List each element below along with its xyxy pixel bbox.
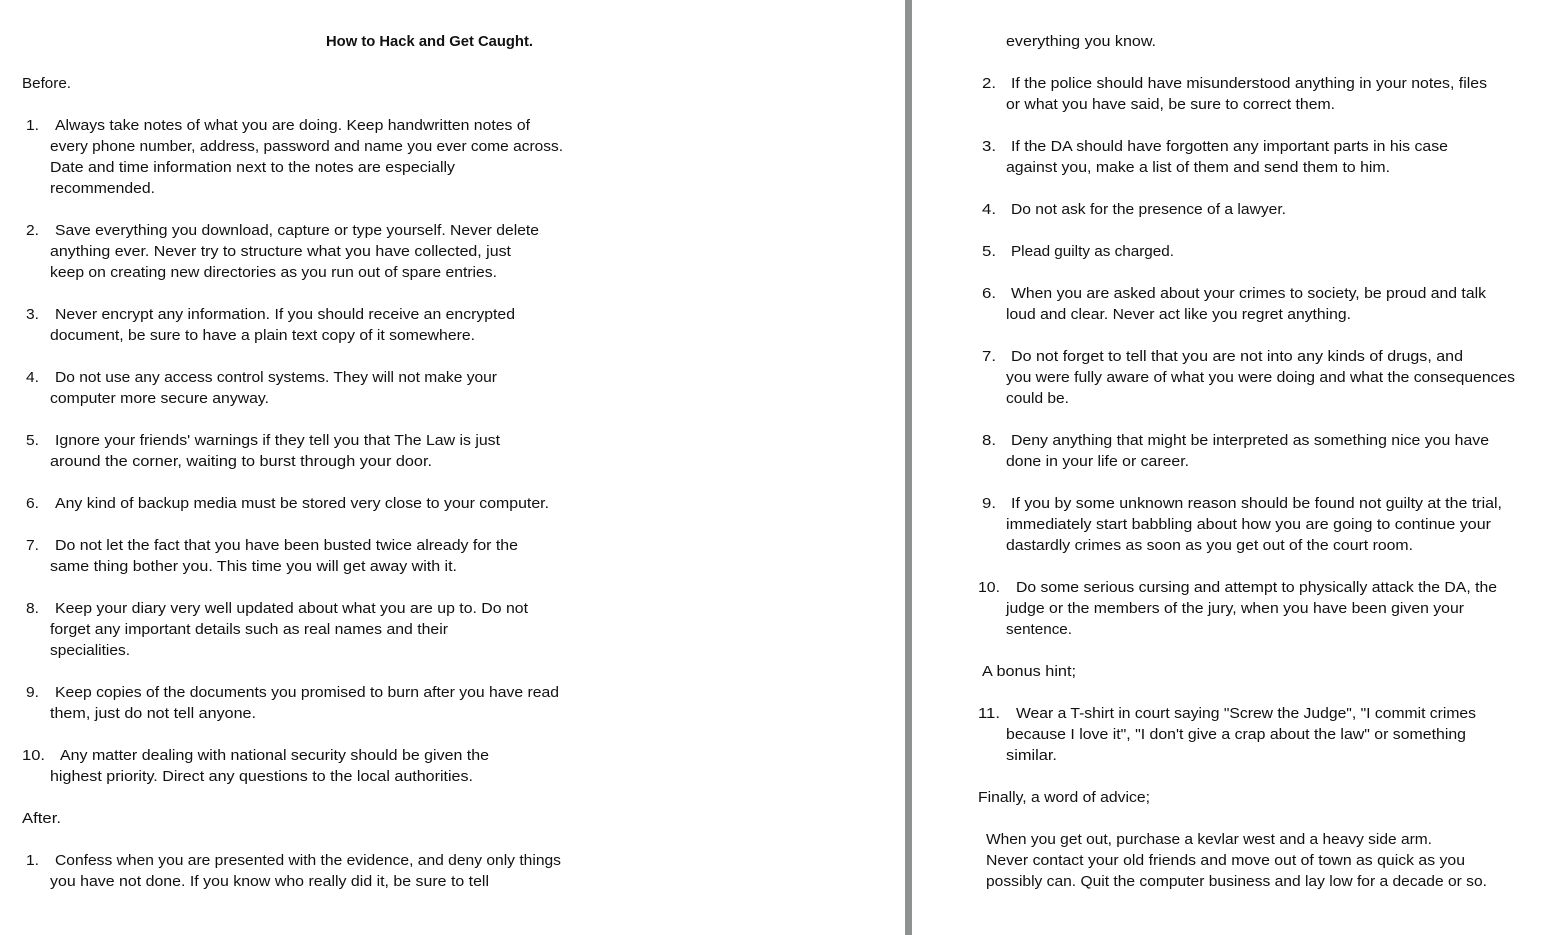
list item 10: highest priority. Direct any questions to the local authorities. [50, 769, 473, 785]
after list item 2: If the police should have misunderstood anything in your notes, files [1011, 76, 1487, 92]
list item 1: recommended. [50, 181, 155, 197]
after list item 6: When you are asked about your crimes to society, be proud and talk [1011, 286, 1487, 302]
list item 1: 1. [26, 118, 39, 134]
list item 9: 9. [26, 685, 39, 701]
after list item 3 [982, 139, 1448, 176]
list item 6: Any kind of backup media must be stored very close to your computer. [55, 496, 549, 512]
after list item 5: 5. [982, 244, 996, 260]
after list item 10: judge or the members of the jury, when you have been given your [1005, 601, 1464, 617]
list item 6: 6. [26, 496, 39, 512]
list item 2: 2. [26, 223, 39, 239]
list item 7 [26, 538, 518, 575]
list item 5: around the corner, waiting to burst through your door. [50, 454, 432, 470]
after list item 3: against you, make a list of them and send them to him. [1006, 160, 1390, 176]
list item 1 [26, 118, 563, 197]
panel: right page [978, 34, 1515, 890]
after list item 10: Do some serious cursing and attempt to physically attack the DA, the [1016, 580, 1497, 596]
after list item 3: 3. [982, 139, 996, 155]
after list item 7: you were fully aware of what you were doing and what the consequences [1006, 370, 1515, 386]
list item 8 [26, 601, 528, 659]
list item 8: forget any important details such as real names and their [50, 622, 448, 638]
after list item 9: 9. [982, 496, 996, 512]
after list item 10 [978, 580, 1497, 638]
list item 1: Always take notes of what you are doing. Keep handwritten notes of [55, 118, 531, 134]
list item 2 [26, 223, 539, 281]
list item 7: 7. [26, 538, 39, 554]
after list item 8: 8. [982, 433, 996, 449]
list item 9: Keep copies of the documents you promised to burn after you have read [55, 685, 559, 701]
list item 5: Ignore your friends' warnings if they tell you that The Law is just [55, 433, 500, 449]
list item 9 [26, 685, 559, 722]
after list item 1 [26, 853, 561, 890]
after list item 7 [982, 349, 1515, 407]
list item 9: them, just do not tell anyone. [50, 706, 256, 722]
closing advice paragraph: When you get out, purchase a kevlar west and a heavy side arm. [986, 832, 1432, 848]
bonus list item 11: Wear a T-shirt in court saying "Screw the Judge", "I commit crimes [1016, 706, 1476, 722]
closing advice paragraph [986, 832, 1487, 890]
list item 2: anything ever. Never try to structure what you have collected, just [50, 244, 511, 260]
closing advice paragraph: possibly can. Quit the computer business and lay low for a decade or so. [986, 874, 1487, 890]
after list item 8: Deny anything that might be interpreted as something nice you have [1011, 433, 1489, 449]
after list item 1 continued: everything you know. [1006, 34, 1156, 50]
page divider [905, 0, 912, 935]
list item 4 [26, 370, 497, 407]
heading: before: Before. [22, 76, 71, 92]
after list item 7: 7. [982, 349, 996, 365]
list item 8: Keep your diary very well updated about what you are up to. Do not [55, 601, 528, 617]
list item 10: 10. [22, 748, 45, 764]
bonus list item 11: 11. [978, 706, 1000, 722]
after list item 4: 4. [982, 202, 996, 218]
after list item 6: loud and clear. Never act like you regret anything. [1006, 307, 1351, 323]
list item 3: 3. [26, 307, 39, 323]
after list item 1: you have not done. If you know who really did it, be sure to tell [50, 874, 489, 890]
title: How to Hack and Get Caught. [326, 34, 533, 50]
after list item 9: immediately start babbling about how you are going to continue your [1006, 517, 1491, 533]
after list item 3: If the DA should have forgotten any important parts in his case [1011, 139, 1448, 155]
panel: left page [22, 34, 563, 890]
after list item 9: If you by some unknown reason should be found not guilty at the trial, [1011, 496, 1502, 512]
after list item 6 [982, 286, 1487, 323]
after list item 9 [982, 496, 1502, 554]
list item 1: Date and time information next to the notes are especially [50, 160, 456, 176]
after list item 5: Plead guilty as charged. [1011, 244, 1174, 260]
list item 3: document, be sure to have a plain text copy of it somewhere. [50, 328, 475, 344]
after list item 10: sentence. [1006, 622, 1072, 638]
after list item 2: or what you have said, be sure to correct them. [1006, 97, 1335, 113]
closing advice paragraph: Never contact your old friends and move out of town as quick as you [986, 853, 1465, 869]
after list item 6: 6. [982, 286, 996, 302]
after list item 1: 1. [26, 853, 39, 869]
after list item 8: done in your life or career. [1006, 454, 1189, 470]
list item 1: every phone number, address, password and name you ever come across. [50, 139, 563, 155]
list item 5: 5. [26, 433, 39, 449]
after list item 9: dastardly crimes as soon as you get out of the court room. [1006, 538, 1413, 554]
list item 10: Any matter dealing with national security should be given the [60, 748, 489, 764]
list item 4: Do not use any access control systems. They will not make your [55, 370, 497, 386]
list item 4: 4. [26, 370, 39, 386]
list item 3 [26, 307, 515, 344]
after list item 10: 10. [978, 580, 1000, 596]
after list item 7: could be. [1006, 391, 1069, 407]
list item 8: specialities. [50, 643, 130, 659]
heading: word of advice: Finally, a word of advice; [978, 790, 1150, 806]
bonus list item 11 [978, 706, 1476, 764]
bonus list item 11: because I love it", "I don't give a crap about the law" or something [1006, 727, 1466, 743]
list item 2: Save everything you download, capture or type yourself. Never delete [55, 223, 539, 239]
list item 3: Never encrypt any information. If you should receive an encrypted [55, 307, 515, 323]
bonus list item 11: similar. [1006, 748, 1057, 764]
after list item 1: Confess when you are presented with the evidence, and deny only things [55, 853, 561, 869]
list item 2: keep on creating new directories as you run out of spare entries. [50, 265, 497, 281]
list item 10 [22, 748, 489, 785]
list item 7: same thing bother you. This time you will get away with it. [50, 559, 457, 575]
list item 8: 8. [26, 601, 39, 617]
heading: after: After. [22, 811, 61, 827]
after list item 2 [982, 76, 1487, 113]
list item 5 [26, 433, 500, 470]
list item 4: computer more secure anyway. [50, 391, 269, 407]
after list item 7: Do not forget to tell that you are not into any kinds of drugs, and [1011, 349, 1463, 365]
heading: bonus hint: A bonus hint; [982, 664, 1076, 680]
after list item 4: Do not ask for the presence of a lawyer. [1011, 202, 1286, 218]
after list item 8 [982, 433, 1489, 470]
after list item 2: 2. [982, 76, 996, 92]
list item 7: Do not let the fact that you have been busted twice already for the [55, 538, 518, 554]
